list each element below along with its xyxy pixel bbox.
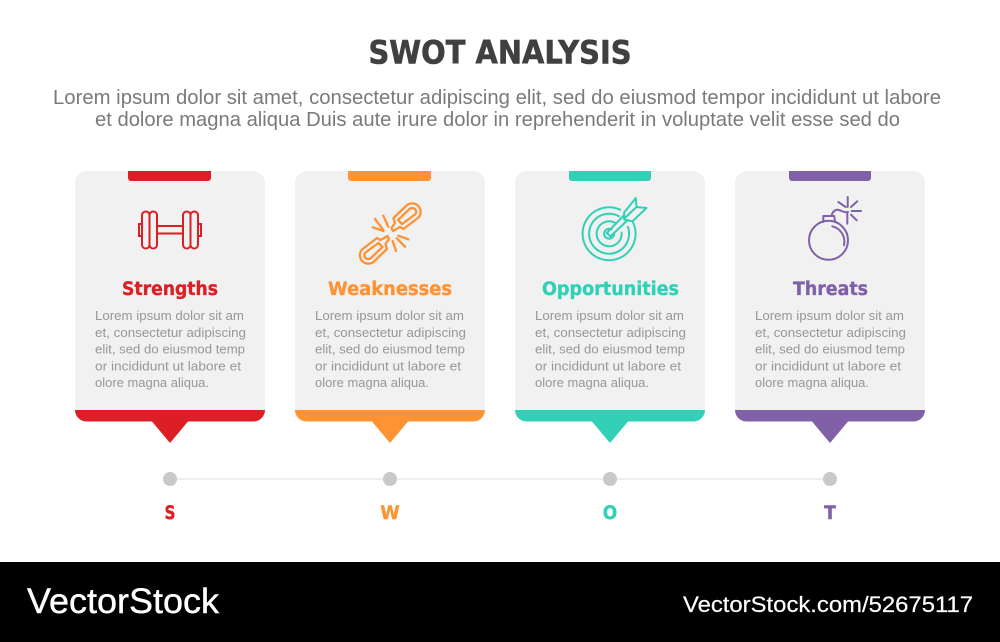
timeline dot O <box>603 472 617 486</box>
text: weaknesses: olore magna aliqua. <box>315 375 429 390</box>
text: strengths: olore magna aliqua. <box>95 375 209 390</box>
panel: opportunities <box>515 171 705 443</box>
icon: broken chain <box>360 203 421 264</box>
text: opportunities: Lorem ipsum dolor sit am <box>535 308 684 323</box>
timeline dot S <box>163 472 177 486</box>
text: opportunities: or incididunt ut labore et <box>535 358 681 373</box>
timeline line <box>170 478 830 480</box>
icon: bomb <box>809 197 861 260</box>
text: opportunities <box>535 308 686 390</box>
text: strengths: or incididunt ut labore et <box>95 358 241 373</box>
text: opportunities: elit, sed do eiusmod temp <box>535 342 685 357</box>
footer url: VectorStock.com/52675117 <box>683 592 973 617</box>
icon: target with arrow <box>583 198 646 260</box>
text: threats: olore magna aliqua. <box>755 375 869 390</box>
timeline dot W <box>383 472 397 486</box>
subtitle <box>53 87 941 131</box>
letter O: O <box>603 502 617 524</box>
letter S: S <box>164 502 176 524</box>
text: weaknesses: Lorem ipsum dolor sit am <box>315 308 464 323</box>
text: threats <box>755 308 906 390</box>
subtitle: et dolore magna aliqua Duis aute irure dolor in reprehenderit in voluptate velit esse sed do <box>95 109 900 131</box>
text: threats: et, consectetur adipiscing <box>755 325 906 340</box>
title: SWOT ANALYSIS <box>368 34 632 72</box>
panel: strengths <box>75 171 265 443</box>
text: strengths: elit, sed do eiusmod temp <box>95 342 245 357</box>
heading: strengths: Strengths <box>122 279 218 300</box>
timeline dot T <box>823 472 837 486</box>
text: threats: elit, sed do eiusmod temp <box>755 342 905 357</box>
heading: weaknesses: Weaknesses <box>328 279 452 300</box>
text: strengths: Lorem ipsum dolor sit am <box>95 308 244 323</box>
text: weaknesses: elit, sed do eiusmod temp <box>315 342 465 357</box>
footer band <box>0 562 1000 642</box>
panel: threats <box>735 171 925 443</box>
text: threats: Lorem ipsum dolor sit am <box>755 308 904 323</box>
subtitle: Lorem ipsum dolor sit amet, consectetur adipiscing elit, sed do eiusmod tempor incididunt ut labore <box>53 87 941 109</box>
footer logo: VectorStock <box>27 582 220 621</box>
heading: threats: Threats <box>793 279 868 300</box>
letter W: W <box>380 502 400 524</box>
text: weaknesses: et, consectetur adipiscing <box>315 325 466 340</box>
heading: opportunities: Opportunities <box>542 279 679 300</box>
text: weaknesses <box>315 308 466 390</box>
text: threats: or incididunt ut labore et <box>755 358 901 373</box>
text: strengths: et, consectetur adipiscing <box>95 325 246 340</box>
text: opportunities: et, consectetur adipiscing <box>535 325 686 340</box>
letter T: T <box>824 502 836 524</box>
text: strengths <box>95 308 246 390</box>
panel: weaknesses <box>295 171 485 443</box>
text: opportunities: olore magna aliqua. <box>535 375 649 390</box>
text: weaknesses: or incididunt ut labore et <box>315 358 461 373</box>
icon: dumbbell <box>139 212 201 248</box>
